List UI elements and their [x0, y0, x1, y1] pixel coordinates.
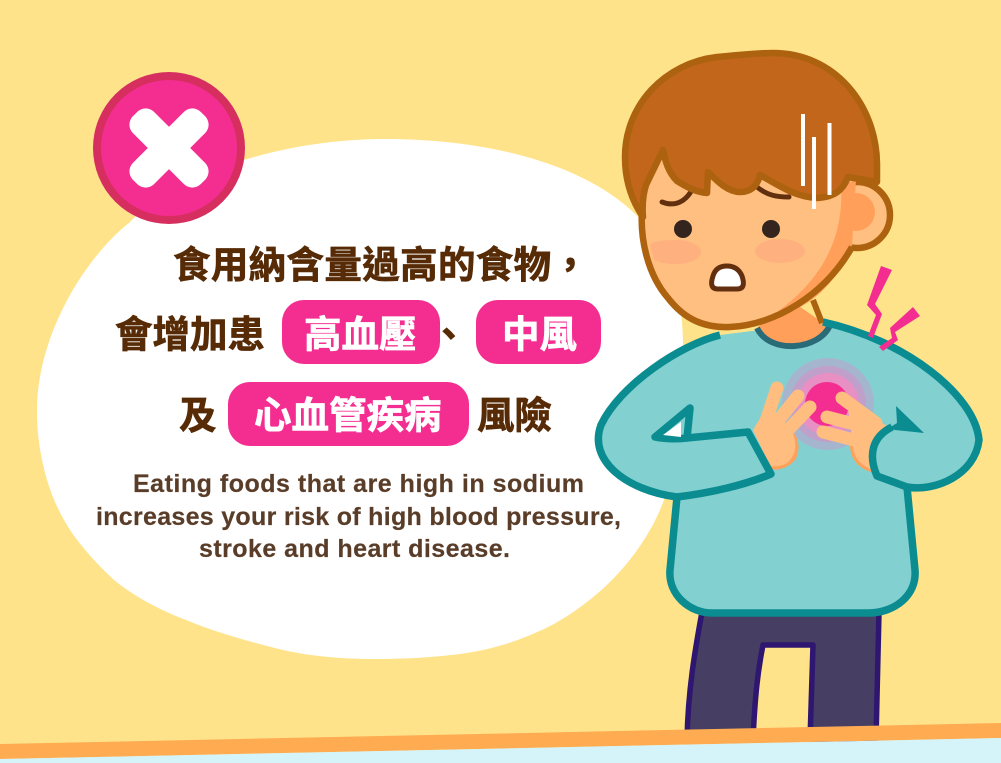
heading line 3: 及	[179, 394, 216, 436]
right hand	[823, 398, 890, 473]
text block: English message: stroke and heart disease.	[199, 535, 510, 563]
right sleeve notch	[889, 406, 924, 433]
left hand	[753, 388, 810, 470]
eye left	[674, 220, 692, 238]
pill: high blood pressure: 高血壓	[304, 314, 416, 356]
text block: English message: Eating foods that are high in sodium	[133, 470, 584, 498]
text block: English message: increases your risk of high blood pressure,	[96, 503, 621, 531]
text block: English message	[96, 470, 621, 563]
hair	[625, 53, 877, 217]
pill: cardiovascular disease	[228, 382, 469, 446]
right sleeve outline	[823, 322, 979, 488]
heading line 2: 、	[430, 314, 468, 356]
heading line 2	[115, 300, 601, 364]
cheek right	[755, 239, 805, 263]
heading line 3	[179, 382, 552, 446]
head	[625, 53, 890, 327]
pants	[687, 612, 879, 740]
eye right	[762, 220, 780, 238]
eyebrow right	[757, 187, 789, 197]
sweater	[598, 300, 979, 613]
icon: cross badge	[93, 72, 245, 224]
eyebrow left	[662, 190, 692, 204]
mouth	[712, 266, 743, 289]
illustration: boy with chest pain	[598, 53, 979, 740]
heading: Chinese message	[115, 244, 601, 446]
panel: white speech blob	[37, 139, 683, 659]
pill: stroke	[476, 300, 601, 364]
right cuff fill	[872, 427, 960, 490]
left sleeve outline	[598, 335, 771, 497]
cheek left	[650, 240, 701, 264]
collar and neck	[757, 300, 830, 346]
face	[642, 150, 856, 327]
heading line 1: 食用納含量過高的食物，	[173, 244, 589, 286]
pill: high blood pressure	[282, 300, 440, 364]
heart pain glow	[782, 358, 874, 450]
pill: cardiovascular disease: 心血管疾病	[254, 394, 442, 436]
ear	[824, 182, 890, 248]
left sleeve notch	[663, 422, 681, 437]
heading line 2: 會增加患	[115, 314, 265, 356]
floor band	[0, 723, 1001, 763]
heading line 3: 風險	[477, 394, 552, 436]
sweat lines	[801, 114, 832, 209]
pain lightning bolts	[867, 266, 920, 351]
body outline	[670, 487, 915, 613]
pill: stroke: 中風	[502, 314, 577, 356]
